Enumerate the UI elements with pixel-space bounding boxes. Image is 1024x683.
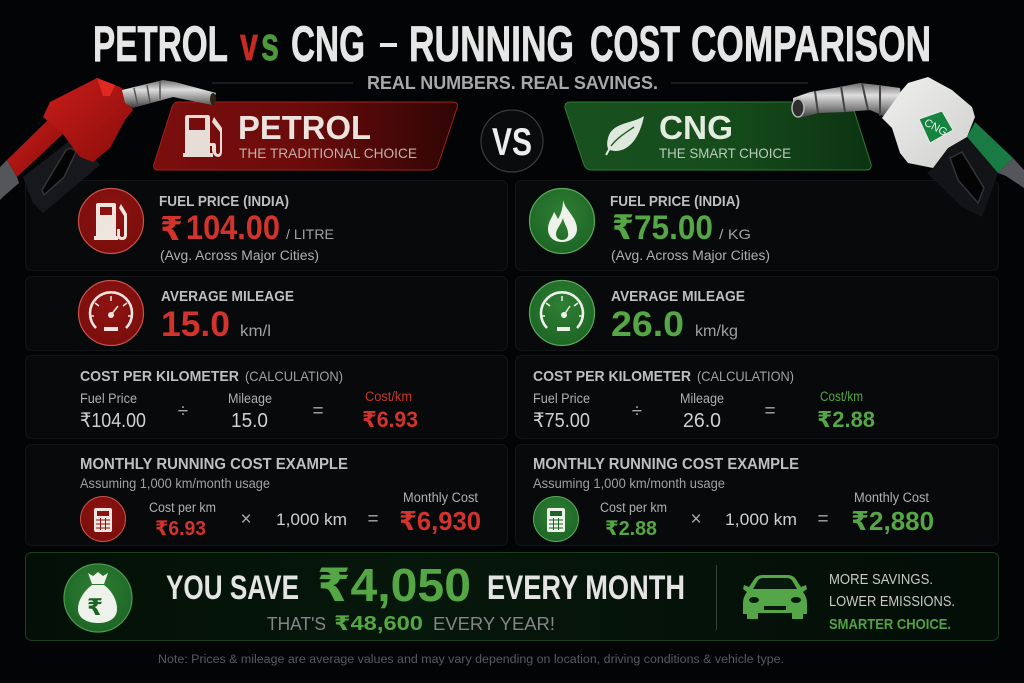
panel: cng monthly cost: ×	[690, 509, 702, 530]
panel: petrol banner: PETROL	[238, 109, 371, 146]
panel: cng cost per km: ₹75.00	[533, 410, 590, 432]
panel: petrol cost per km: 15.0	[231, 410, 268, 432]
icon: white fuel nozzle	[792, 77, 1024, 217]
panel: savings bar: ₹4,050	[317, 559, 471, 611]
panel: cng cost per km: Fuel Price	[533, 391, 590, 406]
panel: cng monthly cost: 1,000 km	[725, 510, 797, 529]
panel: petrol cost per km: Fuel Price	[80, 391, 137, 406]
panel: cng cost per km: =	[764, 401, 776, 422]
panel: petrol cost per km: COST PER KILOMETER	[80, 368, 239, 385]
panel: cng fuel price: / KG	[719, 226, 751, 242]
panel: petrol monthly cost: 1,000 km	[276, 510, 347, 529]
vs badge	[481, 110, 543, 172]
panel: petrol monthly cost: ×	[240, 509, 252, 530]
panel: petrol monthly cost: Monthly Cost	[403, 490, 478, 505]
panel: petrol cost per km: ÷	[178, 401, 188, 422]
title: s	[261, 17, 279, 70]
subtitle: REAL NUMBERS. REAL SAVINGS.	[367, 73, 658, 93]
icon: red fuel nozzle	[0, 78, 216, 213]
panel: petrol monthly cost: ₹6.93	[155, 518, 206, 540]
panel: petrol monthly cost: Assuming 1,000 km/month usage	[80, 476, 270, 491]
panel: cng cost per km: 26.0	[683, 410, 721, 432]
title: CNG	[291, 16, 365, 72]
panel: petrol cost per km	[26, 356, 508, 438]
panel: petrol monthly cost: MONTHLY RUNNING COST EXAMPLE	[80, 456, 348, 473]
panel: cng monthly cost	[516, 444, 998, 546]
icon: money bag badge: ₹	[87, 594, 103, 620]
icon: money bag badge	[64, 564, 132, 632]
panel: cng cost per km: (CALCULATION)	[697, 368, 794, 384]
cng tag	[919, 111, 953, 143]
icon: calculator badge	[80, 496, 126, 542]
panel: cng mileage: km/kg	[695, 323, 738, 340]
panel: petrol monthly cost: ₹6,930	[399, 506, 481, 536]
panel: petrol cost per km: ₹6.93	[362, 407, 418, 432]
panel: savings bar: THAT'S	[267, 614, 326, 634]
panel: petrol fuel price: FUEL PRICE (INDIA)	[159, 193, 289, 210]
panel: savings bar: EVERY MONTH	[487, 569, 685, 607]
panel: cng fuel price: (Avg. Across Major Cities)	[611, 248, 770, 263]
panel: cng cost per km: COST PER KILOMETER	[533, 368, 691, 385]
panel: savings bar: LOWER EMISSIONS.	[829, 593, 955, 610]
panel: savings bar: EVERY YEAR!	[433, 614, 555, 634]
icon: calculator badge	[534, 496, 578, 542]
panel: petrol mileage: km/l	[240, 323, 271, 340]
panel: petrol monthly cost	[26, 444, 508, 546]
panel: savings bar	[26, 552, 998, 640]
icon: leaf	[606, 116, 644, 155]
icon: flame badge	[530, 188, 594, 254]
panel: petrol cost per km: Cost/km	[365, 389, 412, 404]
panel: petrol monthly cost: =	[367, 509, 379, 530]
panel: cng fuel price: ₹75.00	[612, 209, 713, 247]
icon: speedometer badge	[78, 280, 144, 346]
panel: cng fuel price: FUEL PRICE (INDIA)	[610, 193, 740, 210]
panel: petrol fuel price	[26, 180, 508, 270]
panel: cng cost per km	[516, 356, 998, 438]
panel: savings bar: YOU SAVE	[166, 569, 299, 607]
panel: petrol cost per km: Mileage	[228, 391, 272, 406]
vs badge: VS	[492, 121, 532, 164]
footnote: Note: Prices & mileage are average values and may vary depending on location, driving conditions & vehicle type.	[158, 654, 784, 666]
panel: petrol fuel price: (Avg. Across Major Cities)	[160, 248, 319, 263]
panel: cng monthly cost: ₹2.88	[605, 518, 657, 540]
panel: cng monthly cost: Monthly Cost	[854, 490, 929, 505]
panel: cng cost per km: Mileage	[680, 391, 724, 406]
panel: petrol banner	[154, 102, 457, 170]
panel: cng fuel price	[516, 180, 998, 270]
panel: cng monthly cost: MONTHLY RUNNING COST EXAMPLE	[533, 456, 799, 473]
panel: petrol mileage: AVERAGE MILEAGE	[161, 288, 294, 305]
cng tag: CNG	[922, 117, 949, 139]
panel: petrol fuel price: ₹	[160, 210, 183, 247]
panel: petrol cost per km: ₹104.00	[80, 410, 146, 432]
panel: petrol cost per km: (CALCULATION)	[245, 368, 343, 384]
panel: cng monthly cost: Cost per km	[600, 500, 667, 515]
panel: petrol fuel price: 104.00	[186, 209, 280, 247]
title: v	[240, 17, 258, 70]
panel: petrol banner: THE TRADITIONAL CHOICE	[239, 145, 417, 161]
title: COMPARISON	[691, 16, 931, 72]
panel: petrol cost per km: =	[312, 401, 324, 422]
panel: cng banner: THE SMART CHOICE	[659, 145, 791, 161]
panel: cng cost per km: ÷	[632, 401, 642, 422]
panel: cng monthly cost: Assuming 1,000 km/month usage	[533, 476, 725, 491]
panel: petrol mileage: 15.0	[161, 305, 230, 344]
panel: cng monthly cost: =	[817, 509, 829, 530]
panel: petrol monthly cost: Cost per km	[149, 500, 216, 515]
panel: cng mileage	[516, 276, 998, 350]
title: COST	[590, 16, 680, 72]
icon: car	[743, 575, 807, 619]
panel: cng mileage: AVERAGE MILEAGE	[611, 288, 745, 305]
icon: petrol pump	[183, 115, 222, 157]
icon: pump badge	[78, 188, 144, 254]
panel: cng cost per km: Cost/km	[820, 389, 863, 404]
panel: cng monthly cost: ₹2,880	[851, 506, 934, 536]
panel: cng banner: CNG	[659, 109, 733, 146]
panel: savings bar: SMARTER CHOICE.	[829, 616, 951, 633]
panel: savings bar: MORE SAVINGS.	[829, 571, 933, 588]
panel: petrol fuel price: / LITRE	[286, 226, 334, 242]
panel: petrol mileage	[26, 276, 508, 350]
panel: savings bar: ₹48,600	[334, 613, 423, 635]
title	[93, 16, 931, 72]
panel: cng cost per km: ₹2.88	[817, 407, 875, 432]
title: PETROL	[93, 16, 228, 72]
panel: cng mileage: 26.0	[611, 305, 684, 344]
title: RUNNING	[409, 16, 574, 72]
icon: speedometer badge	[530, 280, 594, 346]
panel: cng banner	[565, 102, 871, 170]
